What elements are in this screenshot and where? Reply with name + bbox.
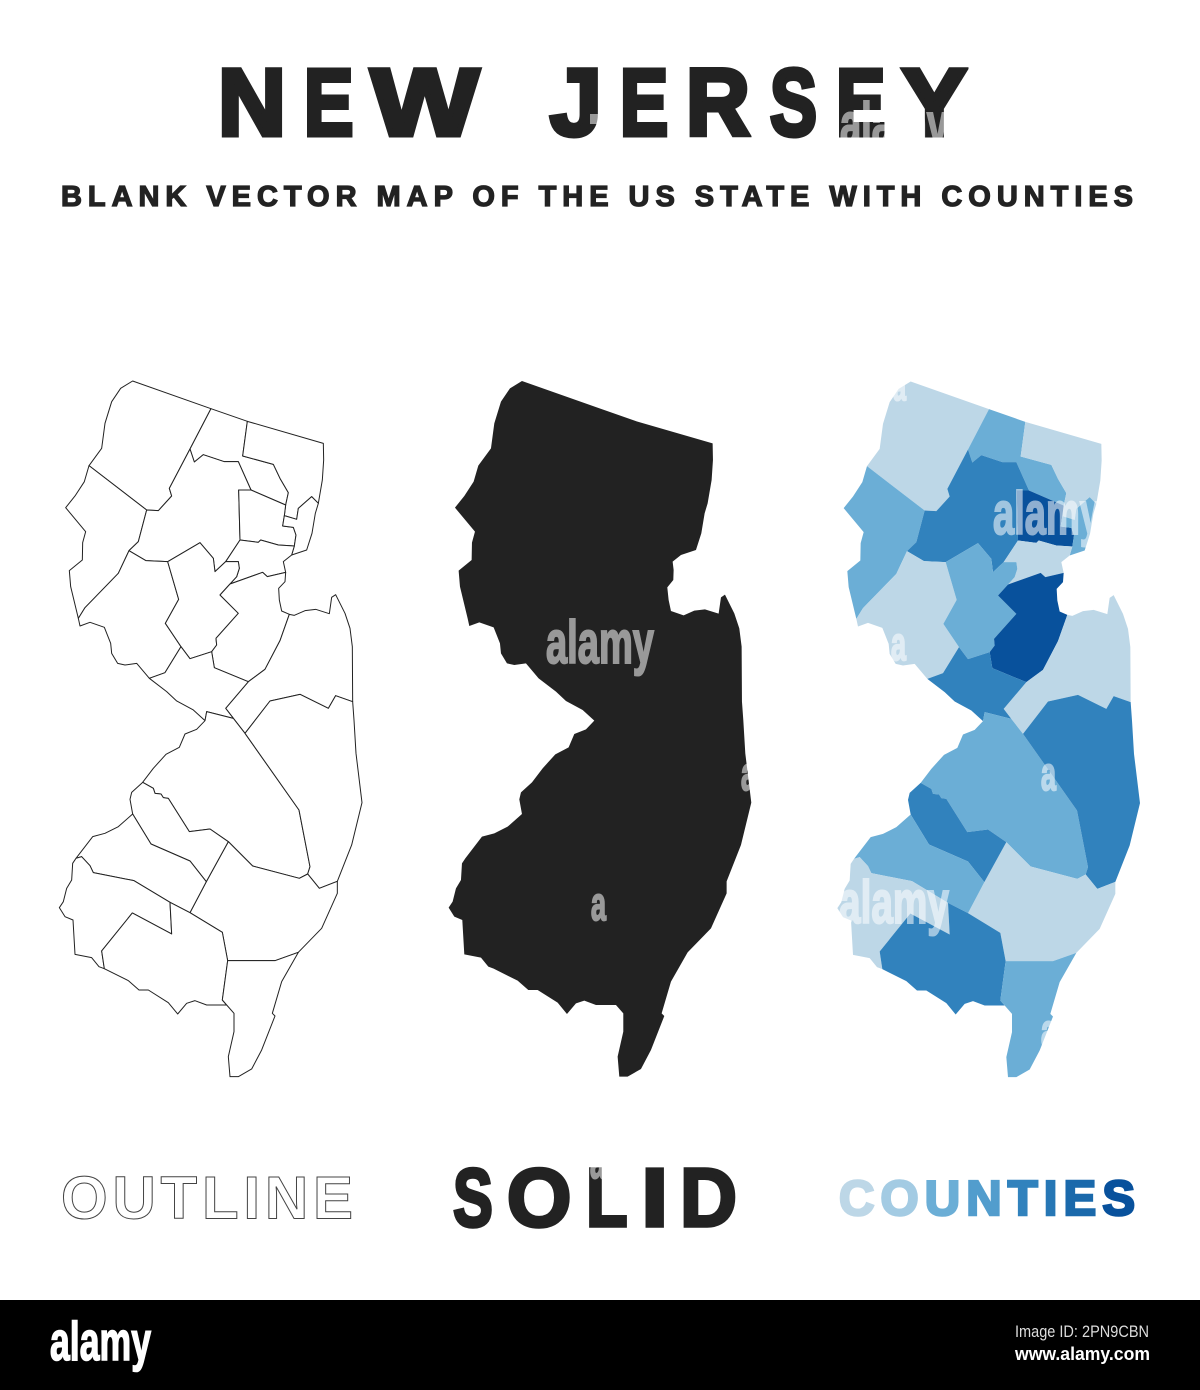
county: Bergen <box>1021 422 1102 520</box>
watermark: over counties north: alamy <box>993 480 1101 547</box>
map: solid silhouette <box>449 381 751 1077</box>
county: Cape May <box>1000 953 1076 1077</box>
footer: website: www.alamy.com <box>1014 1344 1150 1364</box>
watermark: fragment on title J <box>591 115 598 123</box>
title: N <box>218 50 286 156</box>
title: W <box>371 50 479 156</box>
label: SOLID <box>452 1151 737 1244</box>
county: Monmouth <box>1004 595 1131 734</box>
watermark: counties north letter: a <box>893 365 906 409</box>
county: Atlantic <box>968 842 1115 961</box>
map: outline with county borders <box>59 381 362 1077</box>
title: S <box>770 50 817 156</box>
county: Morris <box>907 449 1029 572</box>
map: counties shaded in blue <box>837 381 1140 1077</box>
title: E <box>304 50 353 156</box>
county: Warren <box>844 466 925 619</box>
watermark: counties letter: a <box>1041 747 1056 800</box>
county: Ocean <box>1023 695 1140 889</box>
county: Cumberland <box>880 903 1006 1014</box>
county: Camden <box>908 783 1006 882</box>
watermark: over counties south: alamy <box>839 869 949 936</box>
county: Salem <box>837 857 950 969</box>
label: OUTLINE: OUTLINE <box>61 1164 353 1232</box>
title: J <box>550 50 602 156</box>
county: Somerset <box>943 543 1017 659</box>
label: COUNTIES: COUNTIES <box>839 1172 1135 1226</box>
title <box>218 50 968 156</box>
title: E <box>836 50 885 156</box>
watermark: on SOLID label: a <box>590 1135 605 1188</box>
title: Y <box>902 50 967 156</box>
label: SOLID: O <box>507 1151 571 1244</box>
county: Hudson <box>1061 497 1096 555</box>
subtitle: BLANK VECTOR MAP OF THE US STATE WITH COUNTIES <box>61 181 1133 213</box>
county: Hunterdon <box>856 551 959 679</box>
footer bar <box>0 1300 1200 1390</box>
label: SOLID: I <box>641 1151 669 1244</box>
county: Essex <box>1017 490 1074 546</box>
watermark: solid map edge letter: a <box>741 747 756 800</box>
title: E <box>620 50 668 156</box>
watermark: counties south letter: a <box>1041 1004 1056 1057</box>
county: Burlington <box>921 712 1088 879</box>
watermark: counties west letter: a <box>891 617 906 670</box>
county: Middlesex <box>990 573 1067 682</box>
county: Union <box>1004 540 1072 584</box>
county: Passaic <box>968 409 1066 505</box>
county: Sussex <box>867 381 989 511</box>
watermark: solid map letter: a <box>591 877 606 930</box>
footer: image id: Image ID: 2PN9CBN <box>1015 1322 1149 1341</box>
label: SOLID: L <box>586 1151 627 1244</box>
title: R <box>686 50 749 156</box>
county: Mercer <box>927 647 1026 721</box>
label: SOLID: D <box>680 1151 737 1244</box>
watermark: over solid map: alamy <box>546 609 654 676</box>
watermark: over title: alamy <box>840 91 948 158</box>
county: Gloucester <box>854 814 984 913</box>
footer logo: alamy: alamy <box>50 1310 151 1372</box>
label: SOLID: S <box>452 1151 492 1244</box>
